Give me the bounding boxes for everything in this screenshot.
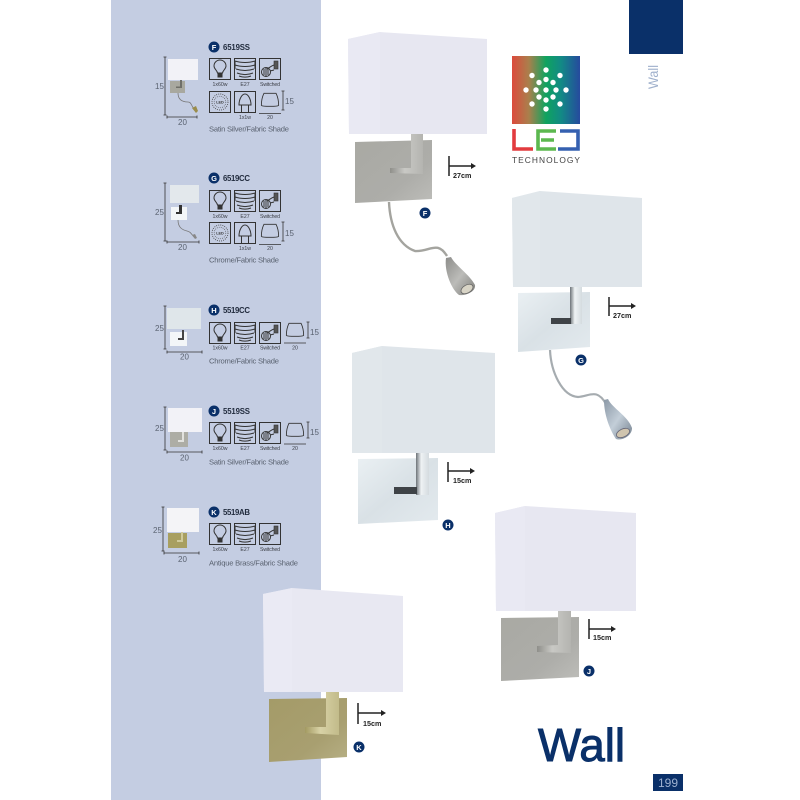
corner tab (629, 0, 683, 54)
LED block lettering (514, 129, 578, 149)
shade (348, 32, 487, 134)
badge on lamp G: G (578, 356, 584, 365)
badge on lamp F (420, 208, 430, 218)
code F: 6519SS (223, 43, 250, 52)
badge K (208, 506, 220, 518)
back plate (518, 292, 590, 352)
spec icons J: E27 (240, 446, 250, 452)
thumbnail K: 20 (178, 555, 187, 564)
spec icons F: 1x60w (212, 82, 228, 88)
shade (352, 346, 495, 453)
badge on lamp J (584, 666, 594, 676)
spec icons F: 1x1w (239, 115, 251, 121)
spec icons H: 15 (310, 328, 319, 337)
thumbnail G: 25 (155, 208, 164, 217)
thumbnail J (155, 407, 202, 462)
page number (653, 774, 683, 791)
spec icons G: 1x1w (239, 246, 251, 252)
spec icons G: 15 (285, 229, 294, 238)
spec icons F (210, 58, 294, 121)
finish J: Satin Silver/Fabric Shade (209, 458, 289, 466)
spec icons K: 1x60w (212, 547, 228, 553)
projection arrow H: 15cm (448, 462, 475, 485)
badge on lamp H (442, 520, 454, 530)
thumbnail H: 25 (155, 324, 164, 333)
spec icons F: LED (216, 100, 224, 104)
code K: 5519AB (223, 508, 250, 517)
back plate (355, 140, 432, 203)
badge G: G (211, 174, 217, 183)
spec icons G: Switched (260, 214, 280, 220)
badge on lamp G (576, 354, 586, 366)
badge on lamp K: K (356, 743, 362, 752)
projection arrow F: 27cm: 27cm (453, 171, 471, 180)
flex reading light (550, 350, 632, 440)
product row G: 6519CC (155, 172, 294, 264)
thumbnail G (155, 183, 199, 252)
spec icons F: Switched (260, 82, 280, 88)
spec icons H (210, 322, 319, 352)
projection arrow H: 15cm: 15cm (453, 476, 471, 485)
spec icons G: 1x60w (212, 214, 228, 220)
page number: 199 (658, 776, 678, 790)
light dots (523, 67, 569, 112)
finish K: Antique Brass/Fabric Shade (209, 558, 298, 568)
spec icons J: 15 (310, 428, 319, 437)
badge H: H (211, 306, 217, 315)
thumbnail J: 20 (180, 454, 189, 462)
section label: Wall: Wall (646, 65, 661, 89)
thumbnail H (155, 306, 202, 362)
thumbnail F: 15 (155, 82, 164, 91)
badge F: F (212, 43, 217, 52)
lamp H photo (352, 346, 495, 524)
product row J: 5519SS (155, 406, 319, 466)
spec icons H: 20 (292, 346, 298, 352)
projection arrow K: 15cm (358, 703, 386, 728)
lamp F photo (348, 32, 487, 296)
spec icons G (210, 190, 294, 252)
spec icons F: E27 (240, 82, 250, 88)
badge on lamp F: F (423, 209, 428, 218)
spec icons H: E27 (240, 346, 250, 352)
back plate (269, 698, 347, 762)
spec icons F: 20 (267, 115, 273, 121)
arm (537, 611, 571, 653)
thumbnail F (155, 57, 198, 127)
lamp J photo (495, 506, 636, 681)
thumbnail K: 25 (153, 526, 162, 535)
product row F: 6519SS (155, 42, 294, 134)
spec icons K: E27 (240, 547, 250, 553)
product row H: 5519CC (155, 304, 319, 366)
spec icons J (210, 422, 319, 452)
thumbnail J: 25 (155, 424, 164, 433)
projection arrow K: 15cm: 15cm (363, 719, 381, 728)
arm (305, 692, 339, 735)
badge on lamp H: H (445, 521, 451, 530)
arm (416, 453, 429, 495)
thumbnail G: 20 (178, 243, 187, 252)
badge K: K (211, 508, 217, 517)
projection arrow G: 27cm (609, 297, 636, 320)
back plate (358, 458, 438, 524)
thumbnail H: 20 (180, 352, 189, 362)
arm (390, 134, 423, 174)
badge J (208, 406, 220, 416)
back plate (501, 617, 579, 681)
panel: blue sidebar (111, 0, 321, 800)
spec icons K (210, 524, 280, 553)
arm (570, 287, 582, 324)
spec icons J: 1x60w (212, 446, 228, 452)
shade (495, 506, 636, 611)
spec icons K: Switched (260, 547, 280, 553)
spec icons F: 15 (285, 97, 294, 106)
flex reading light (389, 202, 475, 296)
shade (512, 191, 642, 287)
product row K: 5519AB (153, 506, 298, 568)
projection arrow G: 27cm: 27cm (613, 311, 631, 320)
finish H: Chrome/Fabric Shade (209, 356, 279, 366)
badge J: J (212, 407, 216, 416)
spec icons G: E27 (240, 214, 250, 220)
technology caption: TECHNOLOGY (512, 155, 580, 165)
finish F: Satin Silver/Fabric Shade (209, 124, 289, 134)
spec icons J: Switched (260, 446, 280, 452)
spec icons G: 20 (267, 246, 273, 252)
thumbnail K (153, 507, 199, 564)
finish G: Chrome/Fabric Shade (209, 256, 279, 264)
projection arrow J: 15cm: 15cm (593, 633, 611, 642)
spec icons J: 20 (292, 446, 298, 452)
code H: 5519CC (223, 306, 250, 315)
spec icons H: Switched (260, 346, 280, 352)
spec icons G: LED (216, 232, 224, 236)
projection arrow J: 15cm (589, 619, 616, 642)
code G: 6519CC (223, 174, 250, 183)
page title: Wall (538, 719, 625, 771)
lamp G photo (512, 191, 642, 440)
lamp K photo (263, 588, 403, 762)
projection arrow F: 27cm (449, 156, 476, 180)
thumbnail F: 20 (178, 118, 187, 127)
shade (263, 588, 403, 692)
colour square (512, 56, 580, 124)
LED technology logo (512, 56, 580, 165)
code J: 5519SS (223, 407, 250, 416)
badge H (208, 304, 220, 316)
badge on lamp J: J (587, 667, 591, 676)
badge on lamp K (354, 742, 364, 752)
spec icons H: 1x60w (212, 346, 228, 352)
